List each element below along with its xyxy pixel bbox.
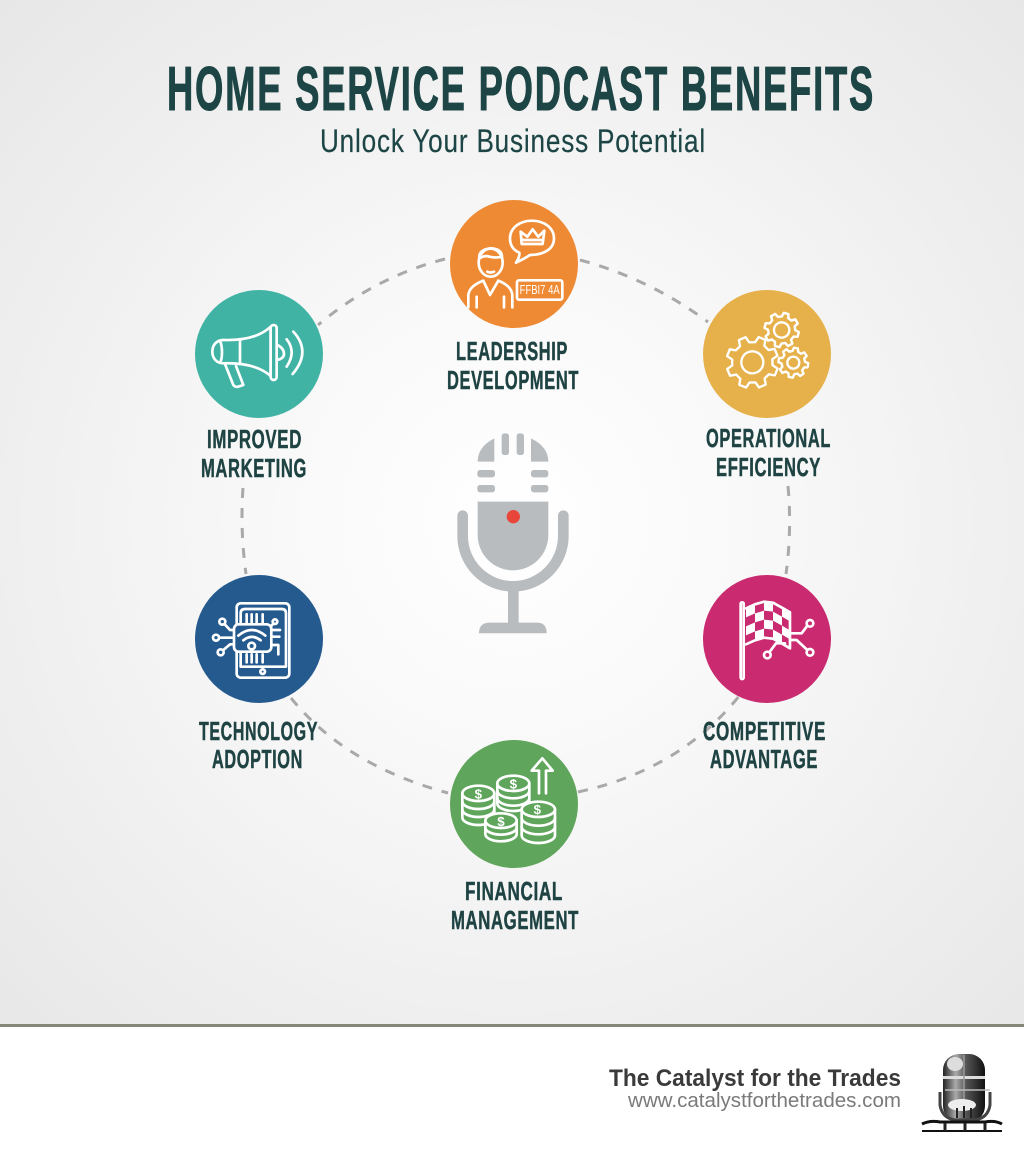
- footer url: www.catalystforthetrades.com: [627, 1090, 901, 1112]
- label: IMPROVED: [207, 424, 302, 454]
- subtitle: Unlock Your Business Potential: [320, 123, 706, 159]
- label: [706, 423, 831, 482]
- circle: orange: [450, 200, 578, 328]
- node: leadership development: [447, 200, 579, 395]
- label: [199, 716, 318, 774]
- icon: central microphone: [463, 433, 563, 633]
- label: ADVANTAGE: [710, 744, 818, 774]
- label: LEADERSHIP: [456, 336, 568, 366]
- node: financial management: [450, 740, 579, 935]
- icon: coin stacks with arrow: $: [497, 814, 505, 829]
- icon: footer microphone logo: [922, 1054, 1002, 1131]
- icon: tablet with chip and wifi: [213, 603, 289, 678]
- label: [703, 716, 826, 774]
- icon: coin stacks with arrow: [462, 758, 555, 843]
- label: FINANCIAL: [465, 876, 563, 906]
- label: TECHNOLOGY: [199, 716, 318, 746]
- icon: coin stacks with arrow: $: [510, 776, 518, 791]
- icon: leader with speech bubble: FFBI7 4A: [520, 283, 560, 297]
- node: operational efficiency: [703, 290, 831, 482]
- footer brand name: The Catalyst for the Trades: [609, 1065, 901, 1092]
- label: DEVELOPMENT: [447, 365, 579, 395]
- label: [201, 424, 307, 483]
- icon: coin stacks with arrow: $: [475, 786, 483, 801]
- label: EFFICIENCY: [716, 452, 821, 482]
- node: improved marketing: [195, 290, 323, 483]
- icon: leader with speech bubble: [468, 221, 562, 307]
- circle: teal: [195, 290, 323, 418]
- label: [447, 336, 579, 395]
- node: competitive advantage: [703, 575, 831, 774]
- label: MARKETING: [201, 453, 307, 483]
- circle: green: [450, 740, 578, 868]
- node: technology adoption: [195, 575, 323, 774]
- label: OPERATIONAL: [706, 423, 831, 453]
- label: [451, 876, 579, 935]
- circle: blue: [195, 575, 323, 703]
- icon: coin stacks with arrow: $: [534, 802, 542, 817]
- icon: checkered flag with nodes: [741, 602, 813, 679]
- label: MANAGEMENT: [451, 905, 579, 935]
- dashed connector ring: [242, 259, 790, 793]
- footer panel: [0, 1024, 1024, 1154]
- icon: megaphone: [212, 325, 302, 387]
- label: COMPETITIVE: [703, 716, 826, 746]
- circle: yellow: [703, 290, 831, 418]
- icon: three gears: [719, 309, 811, 396]
- circle: magenta: [703, 575, 831, 703]
- label: ADOPTION: [212, 744, 303, 774]
